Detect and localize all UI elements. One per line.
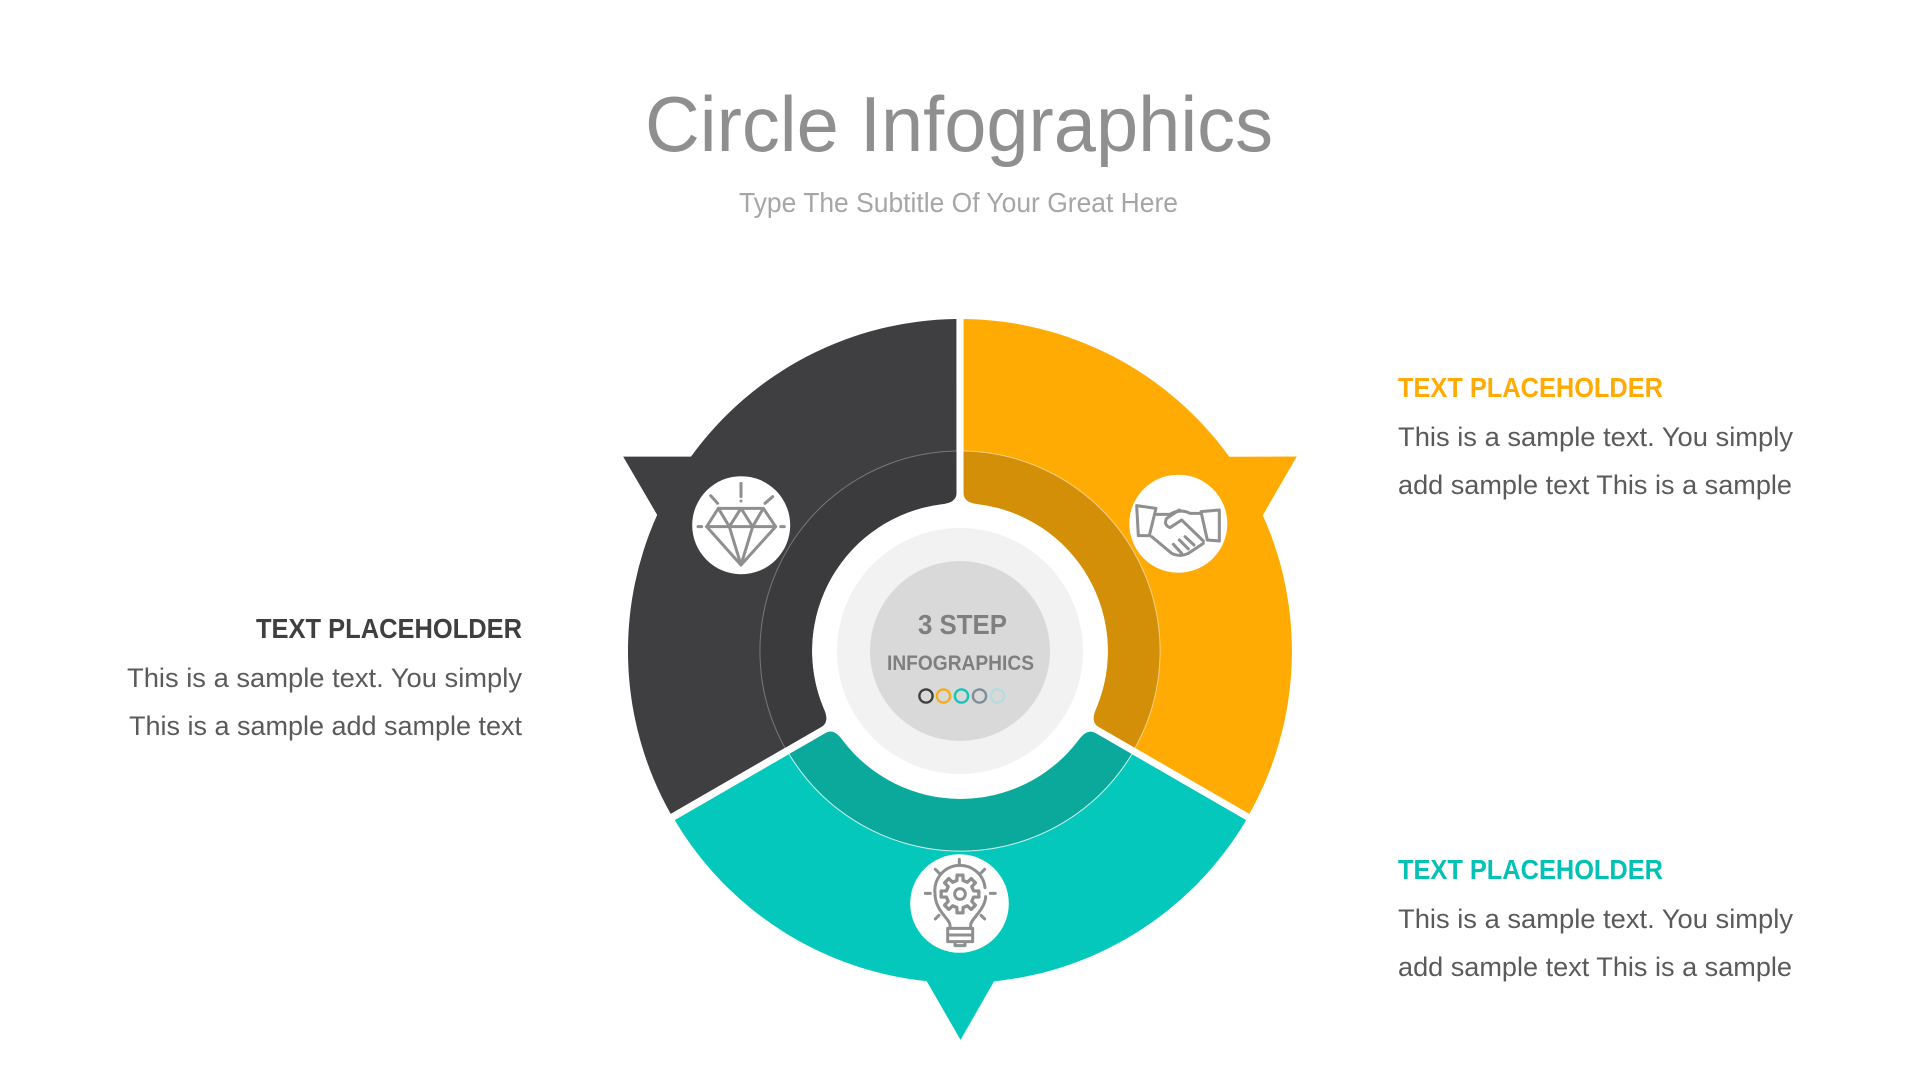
body: orange: add sample text This is a sample — [1398, 470, 1792, 500]
heading: teal: TEXT PLACEHOLDER — [1398, 854, 1663, 885]
body: teal — [1398, 904, 1794, 982]
body: dark: This is a sample text. You simply — [127, 663, 523, 693]
text block: teal — [1398, 854, 1794, 982]
body: teal: This is a sample text. You simply — [1398, 904, 1794, 934]
segment: teal — [651, 573, 1246, 1080]
subtitle: Type The Subtitle Of Your Great Here — [739, 187, 1178, 218]
segment: orange — [964, 319, 1297, 814]
color dots — [919, 689, 1004, 703]
body: dark — [127, 663, 523, 741]
heading: orange: TEXT PLACEHOLDER — [1398, 372, 1663, 403]
body: teal: add sample text This is a sample — [1398, 952, 1792, 982]
center badge — [837, 528, 1083, 774]
icon: lightbulb with gear — [910, 854, 1009, 953]
title: Circle Infographics — [645, 80, 1273, 168]
center heading: 3 STEP — [918, 609, 1007, 640]
icon: diamond — [692, 476, 790, 574]
body: orange: This is a sample text. You simply — [1398, 422, 1794, 452]
body: dark: This is a sample add sample text — [129, 711, 522, 741]
segment: dark — [504, 278, 1099, 814]
heading: dark: TEXT PLACEHOLDER — [256, 613, 522, 644]
body: orange — [1398, 422, 1794, 500]
text block: orange — [1398, 372, 1794, 500]
center subheading: INFOGRAPHICS — [887, 652, 1034, 675]
text block: dark — [127, 613, 523, 741]
icon: handshake — [1129, 475, 1227, 573]
